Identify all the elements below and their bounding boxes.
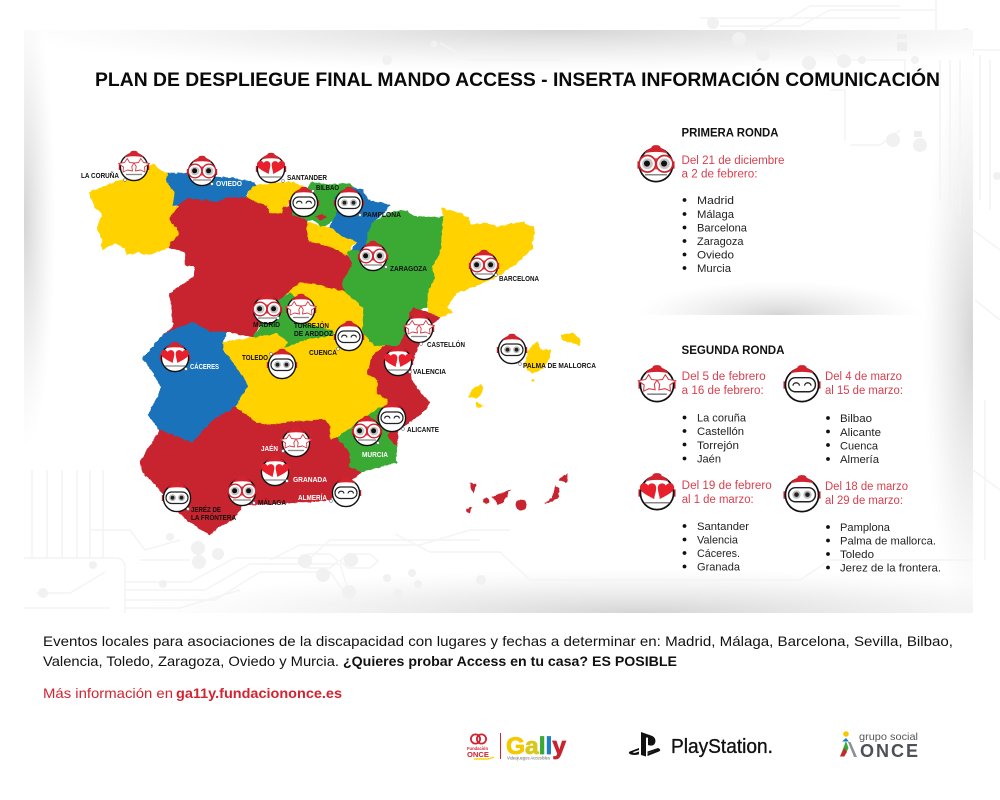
group: 5 a 16 de febrero: Jaén (697, 454, 721, 466)
text block: eventos locales: ¿Quieres probar Access en tu casa? ES POSIBLE (343, 653, 677, 669)
marker: Málaga: MÁLAGA (258, 498, 286, 507)
marker: Alicante (377, 402, 439, 434)
group: 18 a 29 de marzo: Toledo (840, 549, 874, 561)
group: 4 a 15 de marzo: Bilbao (840, 413, 872, 425)
logo: Fundación ONCE y Gally: Fundación (467, 746, 488, 751)
panel: primera ronda (637, 128, 784, 275)
marker: Jaén (261, 427, 312, 457)
marker: Torrejón de Ardoz: DE ARDDOZ (294, 331, 334, 338)
marker: Zaragoza (358, 241, 427, 273)
marker: La Coruña (81, 151, 150, 181)
panel: segunda ronda (638, 345, 941, 574)
marker: Murcia (352, 416, 388, 459)
marker: Torrejón de Ardoz: TORREJÓN (294, 321, 329, 330)
marker: Palma de Mallorca: PALMA DE MALLORCA (523, 363, 596, 370)
marker: Jerez de la Frontera: JERÉZ DE (191, 505, 221, 514)
marker: Santander (256, 153, 327, 183)
marker: Valencia (383, 346, 446, 376)
marker: Bilbao (289, 185, 339, 217)
marker: Cáceres: CÁCERES (190, 362, 219, 371)
marker: Barcelona (469, 250, 539, 283)
text block: más información: ga11y.fundaciononce.es (176, 685, 342, 701)
panel: primera ronda: Barcelona (697, 222, 748, 234)
logo: PlayStation: PlayStation. (671, 736, 773, 758)
panel: segunda ronda: SEGUNDA RONDA (682, 345, 784, 357)
marker: Torrejón de Ardoz (286, 294, 334, 338)
logo: Fundación ONCE y Gally: Videojuegos Accesibles (507, 756, 551, 760)
marker: Toledo: TOLEDO (242, 355, 268, 362)
group: 18 a 29 de marzo: Jerez de la frontera. (840, 562, 941, 574)
text block: eventos locales: Eventos locales para asociaciones de la discapacidad con lugares y fechas a determinar en: Madrid, Málaga, Barcelona, Sevilla, Bilbao, (43, 633, 953, 649)
panel: primera ronda: Del 21 de diciembre (682, 155, 784, 167)
group: 18 a 29 de marzo: Palma de mallorca. (840, 536, 936, 548)
marker: Jerez de la Frontera (162, 482, 236, 522)
group: 18 a 29 de marzo: Pamplona (840, 522, 891, 534)
marker: Granada: GRANADA (293, 477, 327, 484)
group: 4 a 15 de marzo: Almería (840, 454, 880, 466)
group: 5 a 16 de febrero: Del 5 de febrero (682, 371, 766, 383)
marker: Murcia: MURCIA (362, 452, 388, 459)
marker: Oviedo: OVIEDO (216, 181, 243, 188)
marker: Madrid (252, 294, 282, 329)
title: PLAN DE DESPLIEGUE FINAL MANDO ACCESS - INSERTA INFORMACIÓN COMUNICACIÓN (95, 67, 940, 91)
group: 18 a 29 de marzo: al 29 de marzo: (825, 495, 903, 507)
marker: Bilbao: BILBAO (316, 185, 339, 192)
text block: más información (43, 685, 342, 701)
map of Spain by regions (89, 164, 580, 535)
marker: Jaén: JAÉN (261, 444, 278, 453)
marker: Palma de Mallorca (497, 334, 596, 370)
group: 19 de febrero a 1 de marzo: Granada (697, 562, 741, 574)
group: 18 a 29 de marzo: Del 18 de marzo (825, 481, 908, 493)
marker: Granada (260, 456, 327, 486)
group: 4 a 15 de marzo: Del 4 de marzo (825, 371, 902, 383)
marker: Oviedo (187, 156, 243, 188)
panel: primera ronda: Murcia (697, 263, 732, 275)
logo: Grupo Social ONCE (840, 731, 918, 761)
group: 4 a 15 de marzo: Cuenca (840, 440, 879, 452)
logo: PlayStation (629, 732, 773, 758)
marker: Cáceres (160, 342, 219, 372)
group: 19 de febrero a 1 de marzo: Santander (697, 521, 749, 533)
panel: primera ronda: PRIMERA RONDA (682, 128, 778, 140)
marker: Barcelona: BARCELONA (499, 276, 539, 283)
group: 19 de febrero a 1 de marzo: Cáceres. (697, 548, 740, 560)
group: 5 a 16 de febrero: Torrejón (697, 440, 739, 452)
marker: La Coruña: LA CORUÑA (81, 171, 119, 180)
marker: Santander: SANTANDER (287, 175, 327, 182)
circuit traces (24, 470, 973, 613)
panel: primera ronda: Madrid (697, 195, 734, 207)
marker: Almería: ALMERÍA (298, 493, 327, 502)
panel: primera ronda: Málaga (697, 209, 735, 221)
panel: primera ronda: a 2 de febrero: (682, 168, 758, 180)
marker: Castellón (404, 313, 465, 349)
group: 18 a 29 de marzo (783, 476, 941, 574)
panel: primera ronda: Zaragoza (697, 236, 744, 248)
marker: Castellón: CASTELLÓN (427, 340, 465, 349)
marker: Toledo (242, 349, 297, 379)
group: 5 a 16 de febrero: a 16 de febrero: (682, 385, 764, 397)
marker: Valencia: VALENCIA (413, 369, 446, 376)
panel: primera ronda: Oviedo (697, 250, 734, 262)
marker: Cuenca (309, 321, 364, 357)
group: 5 a 16 de febrero (638, 366, 766, 466)
group: 19 de febrero a 1 de marzo (638, 474, 772, 574)
group: 5 a 16 de febrero: Castellón (697, 426, 744, 438)
group: 19 de febrero a 1 de marzo: al 1 de marzo: (682, 494, 754, 506)
text block: eventos locales: Valencia, Toledo, Zaragoza, Oviedo y Murcia. (43, 653, 339, 669)
logo: Fundación ONCE y Gally: ONCE (467, 750, 489, 759)
marker: Málaga (227, 476, 286, 507)
marker: Almería (298, 477, 361, 507)
group: 5 a 16 de febrero: La coruña (697, 412, 747, 424)
logo: Grupo Social ONCE: grupo social (859, 731, 918, 743)
group: 19 de febrero a 1 de marzo: Valencia (697, 534, 739, 546)
group: 4 a 15 de marzo: al 15 de marzo: (825, 385, 903, 397)
logo: Fundación ONCE y Gally (467, 733, 567, 760)
logo: Fundación ONCE y Gally: Gally (506, 733, 567, 760)
islands (469, 333, 580, 407)
marker: Madrid: MADRID (253, 322, 280, 329)
icon: glasses face (637, 146, 675, 182)
group: 19 de febrero a 1 de marzo: Del 19 de febrero (682, 480, 772, 492)
group: 4 a 15 de marzo: Alicante (840, 427, 881, 439)
logo: Grupo Social ONCE: ONCE (860, 741, 918, 761)
marker: Jerez de la Frontera: LA FRÓNTERA (191, 513, 236, 522)
divider shadow between rounds (677, 291, 882, 315)
text block: más información: Más información en (43, 685, 173, 701)
marker: Cuenca: CUENCA (309, 350, 337, 357)
text block: eventos locales (43, 633, 953, 669)
group: 4 a 15 de marzo (783, 366, 903, 466)
marker: Pamplona (334, 187, 401, 219)
marker: Alicante: ALICANTE (407, 427, 439, 434)
marker: Zaragoza: ZARAGOZA (390, 266, 427, 273)
marker: Pamplona: PAMPLONA (363, 212, 401, 219)
